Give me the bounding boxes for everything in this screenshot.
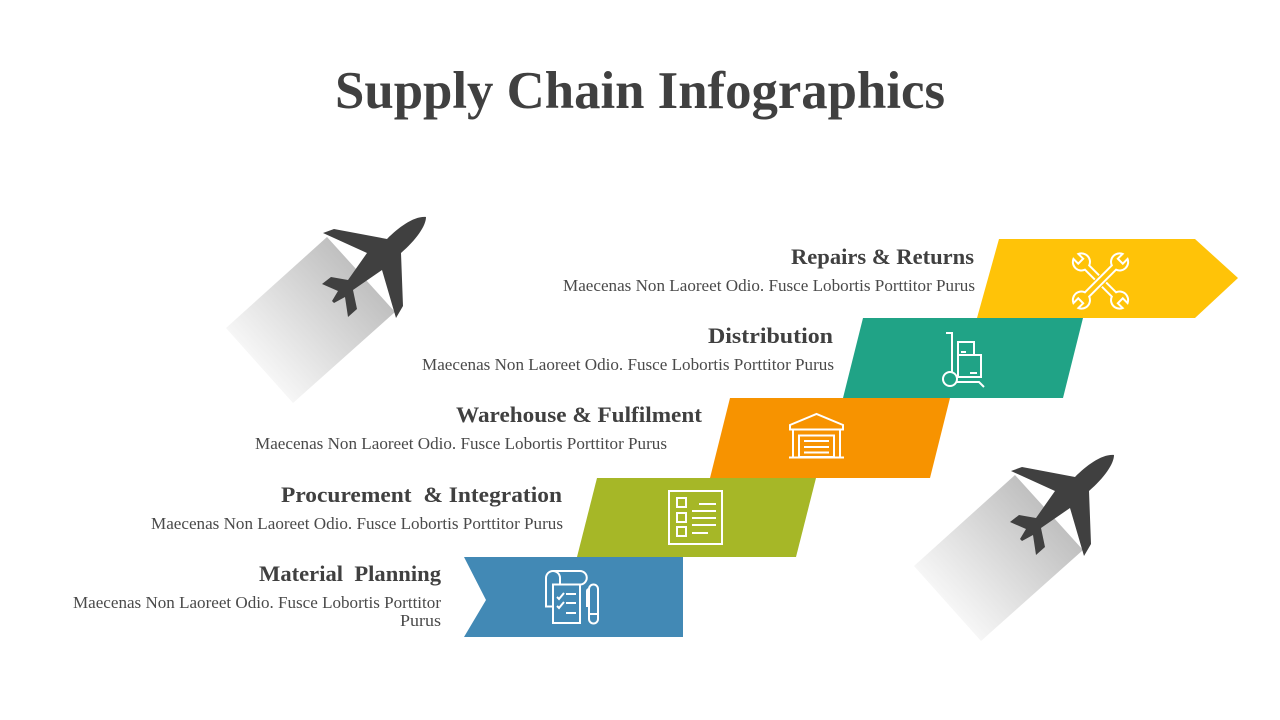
heading: Material Planning [259,561,442,586]
description: Maecenas Non Laoreet Odio. Fusce Lobortis Porttitor Purus [422,355,834,374]
icon: checklist [669,491,722,544]
description: Purus [400,611,441,630]
blue notched band [464,557,683,637]
orange band [710,398,950,478]
description: Maecenas Non Laoreet Odio. Fusce Lobortis Porttitor Purus [563,276,975,295]
title: Supply Chain Infographics [335,62,945,120]
step: material planning [73,557,683,637]
plane silhouette [322,217,426,318]
heading: Warehouse & Fulfilment [456,402,703,427]
icon: crossed wrenches [1070,250,1131,312]
airplane with trail: upper left [226,217,426,403]
step: distribution [422,318,1083,398]
yellow arrow band [977,239,1238,318]
plane trail [226,237,395,403]
heading: Distribution [708,323,834,348]
icon: warehouse [789,414,844,458]
plane trail [914,475,1083,641]
step: warehouse and fulfilment [255,398,950,478]
step: repairs and returns [563,239,1238,318]
icon: hand truck with boxes [943,333,984,387]
description [73,593,442,630]
heading: Repairs & Returns [791,244,974,269]
icon: scroll and pen [546,571,598,624]
description: Maecenas Non Laoreet Odio. Fusce Lobortis Porttitor Purus [151,514,563,533]
plane silhouette [1010,455,1114,556]
green band [577,478,816,557]
heading: Procurement & Integration [281,482,562,507]
description: Maecenas Non Laoreet Odio. Fusce Lobortis Porttitor [73,593,442,612]
teal band [843,318,1083,398]
description: Maecenas Non Laoreet Odio. Fusce Lobortis Porttitor Purus [255,434,667,453]
step: procurement and integration [151,478,816,557]
airplane with trail: lower right [914,455,1114,641]
